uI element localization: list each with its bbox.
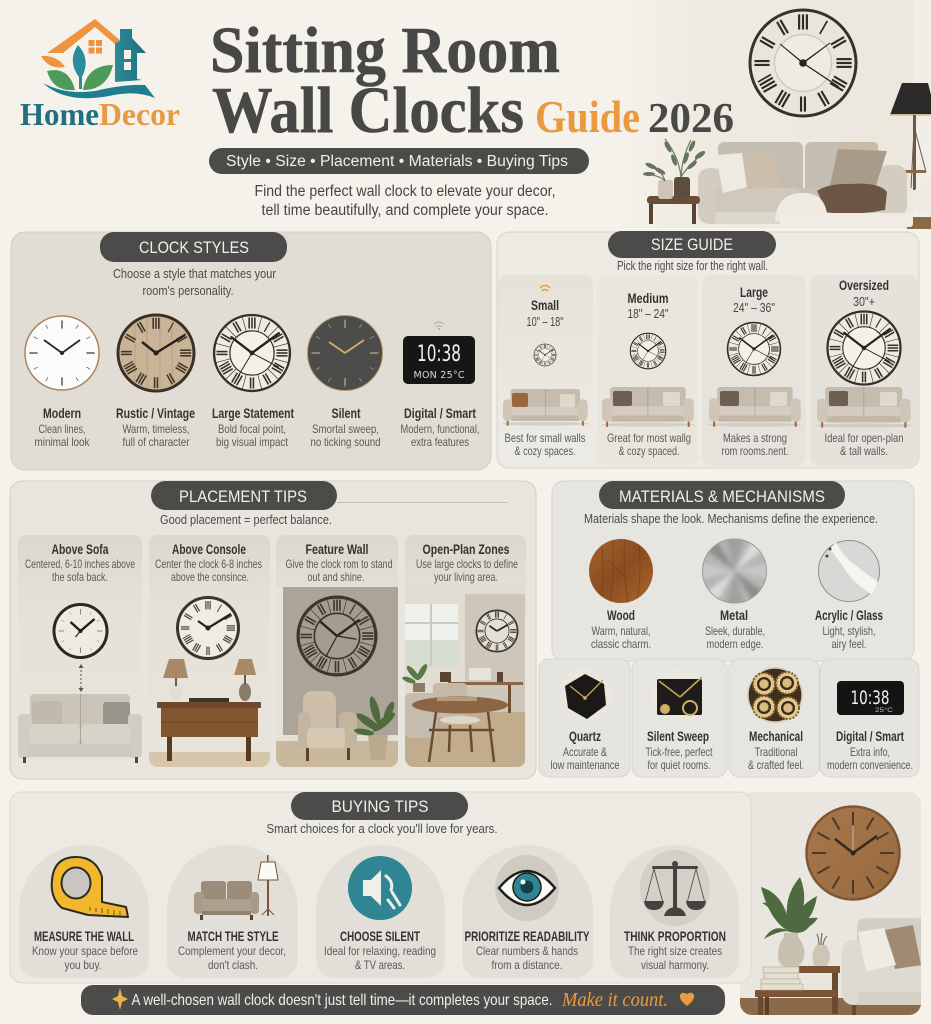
icon: sofa and floor lamp (194, 855, 278, 920)
item: acrylic glass: airy feel. (832, 637, 866, 651)
item: digital smart clock: Modern, functional, (400, 422, 480, 436)
card: small: Small (531, 297, 559, 313)
item: rustic vintage clock: full of character (122, 435, 190, 449)
heading: buying tips (291, 792, 468, 820)
item: digital smart clock: MON 25°C (414, 370, 465, 381)
item: metal: Sleek, durable, (705, 624, 765, 638)
card: above sofa: Centered, 6-10 inches above (25, 557, 135, 571)
callout banner: Make it count. (561, 989, 668, 1011)
subtitle pill (209, 148, 589, 174)
item: rustic vintage clock: Rustic / Vintage (116, 405, 195, 421)
card: large: Makes a strong (723, 431, 787, 445)
card: medium: & cozy spaced. (618, 444, 680, 458)
card: mechanical (729, 659, 819, 777)
text: materials intro: Materials shape the look. Mechanisms define the experience. (584, 511, 878, 526)
card: think proportion: visual harmony. (641, 958, 709, 972)
card: think proportion: THINK PROPORTION (624, 928, 726, 944)
heading: buying tips: BUYING TIPS (332, 797, 428, 816)
card: open-plan zones: your living area. (434, 570, 498, 584)
heading: placement tips: PLACEMENT TIPS (179, 487, 307, 506)
icon: wall clock (476, 610, 518, 652)
item: rustic vintage clock (116, 315, 195, 449)
card: match the style (167, 844, 298, 978)
card: digital smart: 10:38 (850, 687, 890, 709)
callout banner (81, 985, 725, 1015)
item: acrylic glass: Light, stylish, (822, 624, 876, 638)
icon: armchair and plant (298, 691, 397, 761)
panel: clock styles (11, 232, 491, 470)
intro text: tell time beautifully, and complete your space. (262, 202, 548, 219)
icon: armchair (842, 918, 928, 1015)
heading: clock styles (100, 232, 287, 262)
card: above console (149, 535, 270, 767)
text: clock styles intro: Choose a style that matches your (113, 266, 277, 281)
item: acrylic glass: Acrylic / Glass (815, 607, 883, 623)
item: silent clock: Smortal sweep, (312, 422, 379, 436)
card: above console: Center the clock 6-8 inches (155, 557, 262, 571)
item: large statement clock: Large Statement (212, 405, 294, 421)
card: large (702, 275, 806, 466)
icon: plant in vase (761, 877, 830, 968)
card: match the style: Complement your decor, (178, 944, 286, 958)
icon: large roman wall clock (750, 10, 856, 116)
card: feature wall: Give the clock rom to stand (286, 557, 392, 571)
item: modern clock: Clean lines, (38, 422, 86, 436)
card: above sofa: Above Sofa (52, 541, 109, 557)
logo: HomeDecor: Decor (99, 96, 180, 132)
card: feature wall: Feature Wall (306, 541, 368, 557)
card: above console: above the consince. (171, 570, 249, 584)
card: medium: Medium (628, 290, 668, 306)
card: oversized: Oversized (839, 277, 889, 293)
card: silent sweep: for quiet rooms. (648, 758, 710, 772)
card: choose silent: CHOOSE SILENT (340, 928, 420, 944)
title: Sitting Room (210, 14, 560, 87)
item: digital smart clock: 10:38 (417, 342, 461, 367)
card: digital smart: 25°C (875, 708, 894, 714)
heading: size guide: SIZE GUIDE (651, 235, 733, 254)
card: match the style: MATCH THE STYLE (188, 928, 278, 944)
callout banner: A well-chosen wall clock doesn't just tell time—it completes your space. (132, 992, 552, 1009)
card: oversized: 30"+ (853, 294, 875, 309)
card: silent sweep: Silent Sweep (647, 728, 709, 744)
item: acrylic glass (815, 540, 883, 651)
card: above sofa (18, 535, 142, 767)
text: clock styles intro: room's personality. (142, 283, 234, 298)
title: Guide (535, 91, 640, 142)
item: digital smart clock: Digital / Smart (404, 405, 476, 421)
item: large statement clock (212, 315, 294, 449)
text: clock styles intro (113, 266, 277, 298)
card: small: 10" – 18" (526, 314, 564, 329)
card: choose silent: Ideal for relaxing, reading (324, 944, 436, 958)
icon: floor lamp (890, 83, 931, 229)
card: measure the wall: Know your space before (32, 944, 138, 958)
card: think proportion (610, 845, 739, 978)
item: wood (589, 535, 653, 651)
card: oversized: & tall walls. (840, 444, 888, 458)
heading: placement tips (151, 481, 337, 510)
panel: mechanism cards (539, 659, 919, 777)
item: metal: Metal (720, 607, 748, 623)
card: measure the wall: you buy. (64, 958, 102, 972)
card: medium: 18" – 24" (628, 306, 669, 321)
card: think proportion: The right size creates (628, 944, 722, 958)
panel: size guide (497, 231, 919, 468)
text: buying tips intro: Smart choices for a clock you'll love for years. (266, 821, 498, 836)
card: mechanical: Mechanical (749, 728, 803, 744)
card: above console: Above Console (172, 541, 246, 557)
icon: potted plant on side table (643, 139, 706, 224)
card: prioritize readability: Clear numbers & hands (476, 944, 578, 958)
item: modern clock: Modern (43, 405, 81, 421)
card: prioritize readability: from a distance. (492, 958, 562, 972)
item: large statement clock: Bold focal point, (218, 422, 286, 436)
card: silent sweep (632, 659, 727, 777)
card: feature wall (276, 535, 398, 767)
item: rustic vintage clock: Warm, timeless, (122, 422, 190, 436)
card: prioritize readability (462, 845, 593, 978)
item: silent clock: Silent (332, 405, 361, 421)
icon: tape measure (52, 857, 128, 917)
card: large: 24" – 36" (733, 300, 775, 315)
heading: materials and mechanisms (599, 481, 845, 509)
card: quartz: Accurate & (563, 745, 607, 759)
card: feature wall: out and shine. (308, 570, 364, 584)
icon: grey sofa with cushions (698, 142, 913, 227)
card: prioritize readability: PRIORITIZE READABILITY (464, 928, 590, 944)
item: modern clock (25, 316, 99, 449)
panel: placement tips (10, 481, 536, 779)
card: medium: Great for most wallg (607, 431, 691, 445)
item: modern clock: minimal look (34, 435, 90, 449)
intro text: Find the perfect wall clock to elevate your decor, (254, 183, 556, 200)
panel: materials and mechanisms (552, 481, 914, 661)
card: digital smart: Digital / Smart (836, 728, 904, 744)
card: digital smart: Extra info, (850, 745, 890, 759)
icon: wall clock (54, 604, 107, 658)
card: open-plan zones: Use large clocks to define (416, 557, 518, 571)
heading: size guide (608, 231, 776, 258)
item: digital smart clock (400, 322, 480, 449)
item: silent clock: no ticking sound (310, 435, 380, 449)
header illustration: sitting room (614, 0, 931, 229)
card: choose silent: & TV areas. (355, 958, 405, 972)
item: wood: Wood (607, 607, 635, 623)
subtitle pill: Style • Size • Placement • Materials • Buying Tips (226, 153, 568, 170)
card: large: Large (740, 284, 768, 300)
card: silent sweep: Tick-free, perfect (646, 745, 713, 759)
icon: eye (495, 855, 559, 921)
icon: wooden wall clock (806, 806, 900, 900)
icon: dining table and living area (402, 663, 523, 762)
title (210, 14, 734, 147)
item: digital smart clock: extra features (411, 435, 469, 449)
card: medium (597, 275, 698, 466)
heading: materials and mechanisms: MATERIALS & MECHANISMS (619, 487, 825, 506)
card: mechanical: & crafted feel. (748, 758, 804, 772)
card: choose silent (316, 845, 445, 978)
illustration: living room corner (740, 792, 928, 1015)
text: placement intro: Good placement = perfect balance. (160, 512, 332, 527)
card: oversized: Ideal for open-plan (824, 431, 904, 445)
card: quartz (539, 659, 630, 777)
card: open-plan zones: Open-Plan Zones (422, 541, 510, 557)
title: 2026 (648, 96, 734, 142)
card: measure the wall (19, 845, 149, 978)
item: large statement clock: big visual impact (216, 435, 289, 449)
title: Wall Clocks (212, 74, 524, 147)
icon: sofa (18, 694, 142, 763)
item: wood: classic charm. (591, 637, 651, 651)
panel: buying tips (10, 792, 751, 983)
icon: console table with lamps (157, 659, 261, 761)
item: metal (702, 538, 767, 650)
card: digital smart (820, 659, 919, 777)
icon: wall clock (178, 598, 238, 658)
item: metal: modern edge. (706, 637, 764, 651)
icon: side table with books (755, 966, 840, 1015)
card: oversized (810, 275, 918, 466)
card: quartz: Quartz (569, 728, 601, 744)
item: silent clock (308, 316, 382, 449)
icon: oversized feature clock (298, 597, 376, 675)
intro text (254, 183, 556, 219)
card: small: Best for small walls (504, 431, 586, 445)
logo wordmark: Home (20, 96, 99, 132)
text: size guide intro: Pick the right size for the right wall. (617, 258, 768, 273)
card: match the style: don't clash. (208, 958, 258, 972)
card: small (498, 275, 593, 466)
logo: HomeDecor (20, 19, 180, 132)
card: open-plan zones (402, 535, 526, 767)
icon: balance scale (640, 850, 710, 926)
icon: house and leaves (41, 19, 155, 98)
item: wood: Warm, natural, (592, 624, 650, 638)
card: small: & cozy spaces. (514, 444, 576, 458)
card: measure the wall: MEASURE THE WALL (34, 928, 134, 944)
arrow: clearance height (78, 664, 84, 692)
icon: muted speaker (348, 856, 412, 920)
card: large: rom rooms.nent. (722, 444, 788, 458)
heading: clock styles: CLOCK STYLES (139, 238, 249, 257)
card: mechanical: Traditional (754, 745, 798, 759)
card: quartz: low maintenance (550, 758, 620, 772)
card: above sofa: the sofa back. (52, 570, 108, 584)
